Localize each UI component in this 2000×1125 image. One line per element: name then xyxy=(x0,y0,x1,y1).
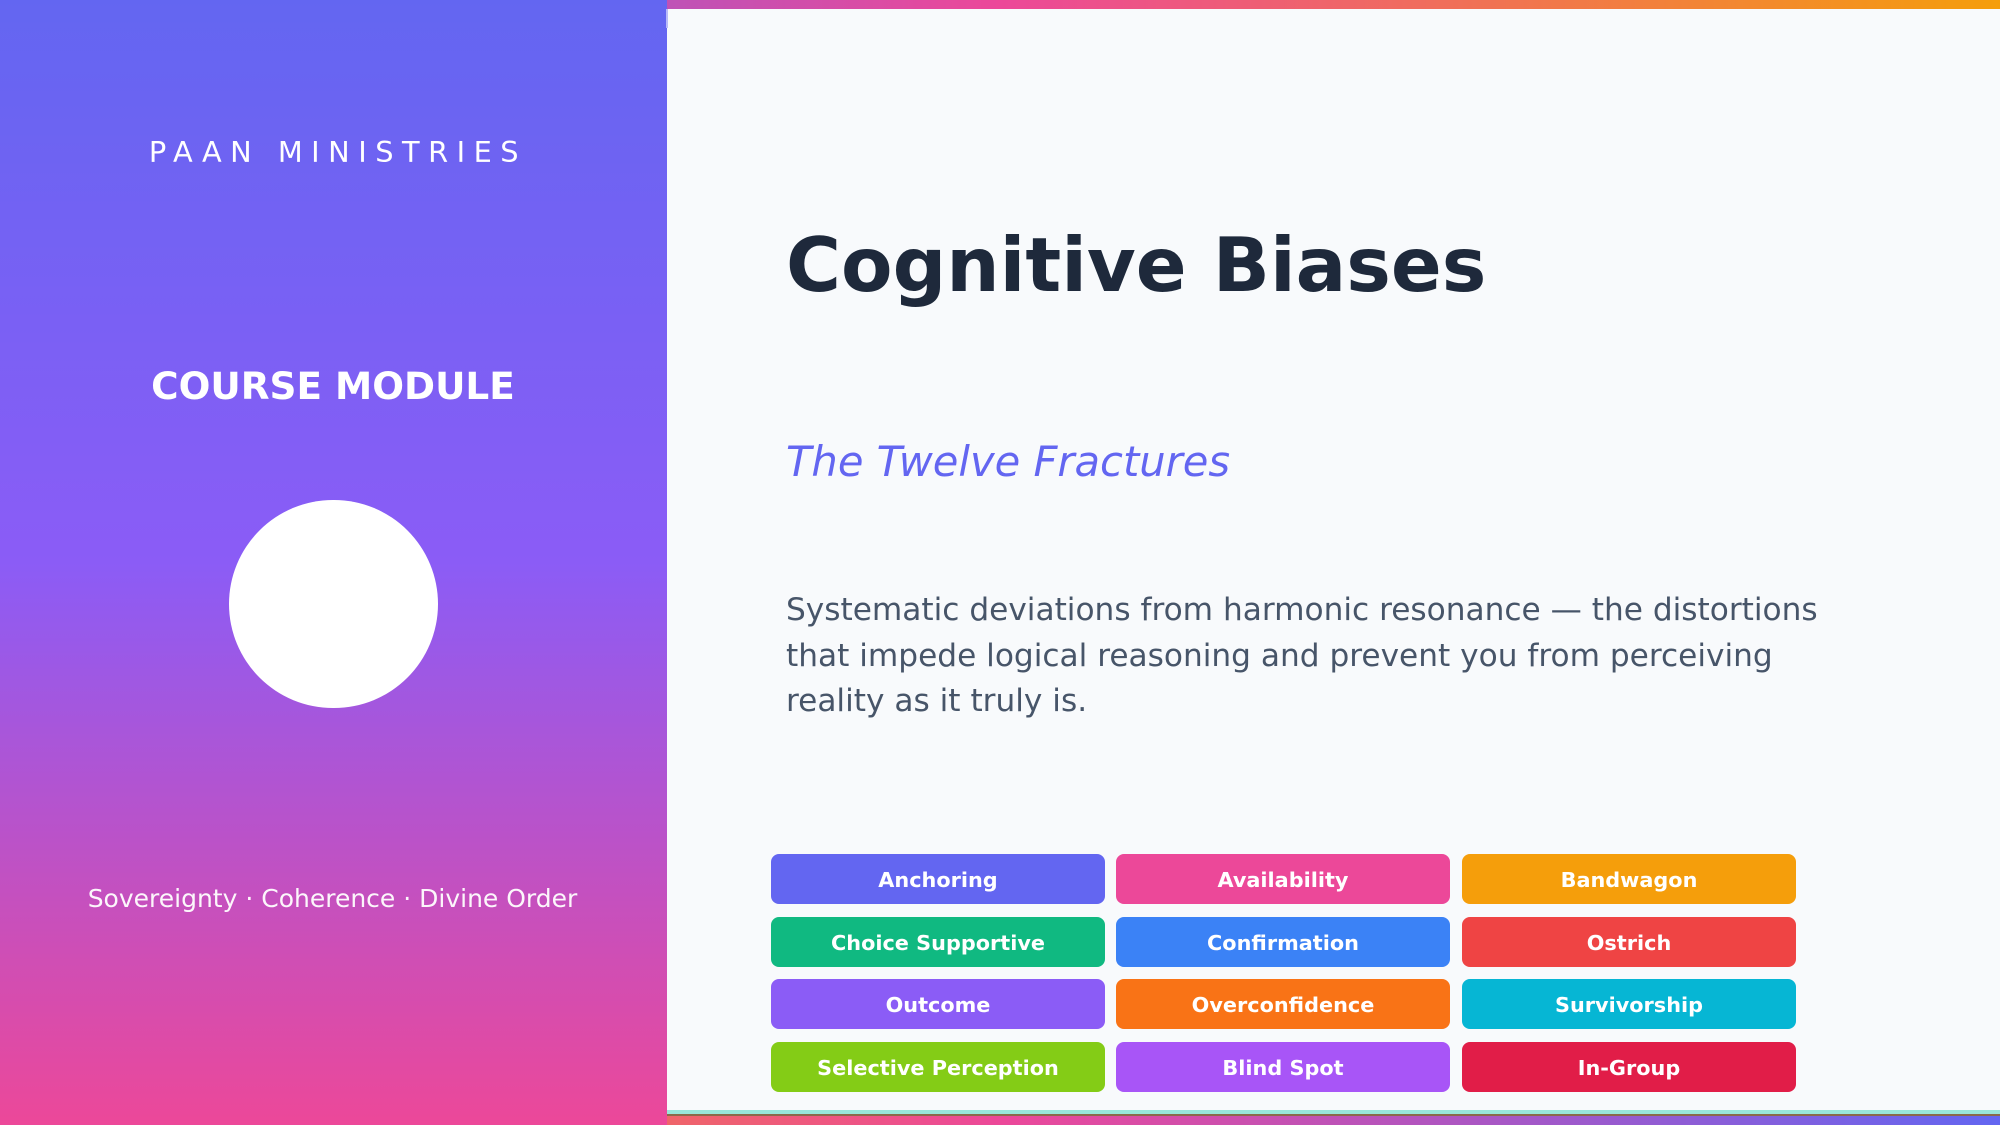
tag: Blind Spot: Blind Spot xyxy=(1222,1056,1344,1080)
tag: In-Group xyxy=(1462,1042,1796,1092)
description xyxy=(786,592,1818,719)
tag: Outcome: Outcome xyxy=(886,993,990,1017)
white circle xyxy=(229,500,438,708)
bias tag grid xyxy=(771,854,1796,1092)
tag: Anchoring xyxy=(771,854,1105,904)
tag: Availability: Availability xyxy=(1217,868,1348,892)
tag: Ostrich xyxy=(1462,916,1796,967)
tag: Bandwagon: Bandwagon xyxy=(1561,868,1697,892)
tag: Ostrich: Ostrich xyxy=(1587,930,1671,954)
tag: Outcome xyxy=(771,979,1105,1029)
tag: Choice Supportive xyxy=(771,916,1105,967)
tag: Bandwagon xyxy=(1462,854,1796,904)
description: Systematic deviations from harmonic resonance — the distortions xyxy=(786,592,1818,628)
tag: Survivorship xyxy=(1462,979,1796,1029)
tag: Overconfidence: Overconfidence xyxy=(1192,993,1374,1017)
title: Cognitive Biases xyxy=(786,221,1486,309)
bottom teal rule xyxy=(667,1110,2000,1116)
top gradient bar xyxy=(0,0,2000,9)
tag: Confirmation: Confirmation xyxy=(1207,930,1359,954)
panel: left sidebar xyxy=(0,0,667,1125)
tag: Anchoring: Anchoring xyxy=(878,868,998,892)
tag: Selective Perception xyxy=(771,1042,1105,1092)
tagline: Sovereignty · Coherence · Divine Order xyxy=(88,884,577,913)
tag: Availability xyxy=(1116,854,1450,904)
bottom gradient bar xyxy=(0,1116,2000,1125)
description: that impede logical reasoning and prevent you from perceiving xyxy=(786,638,1773,674)
organisation name: PAAN MINISTRIES xyxy=(149,135,527,169)
tag: Choice Supportive: Choice Supportive xyxy=(831,930,1045,954)
tag: Selective Perception: Selective Perception xyxy=(817,1056,1059,1080)
module label: COURSE MODULE xyxy=(151,364,515,408)
tag: Confirmation xyxy=(1116,916,1450,967)
description: reality as it truly is. xyxy=(786,683,1087,719)
tag: Survivorship: Survivorship xyxy=(1555,993,1703,1017)
tag: Blind Spot xyxy=(1116,1042,1450,1092)
sidebar edge highlight xyxy=(666,9,668,28)
tag: In-Group: In-Group xyxy=(1578,1056,1680,1080)
subtitle: The Twelve Fractures xyxy=(786,437,1230,486)
tag: Overconfidence xyxy=(1116,979,1450,1029)
